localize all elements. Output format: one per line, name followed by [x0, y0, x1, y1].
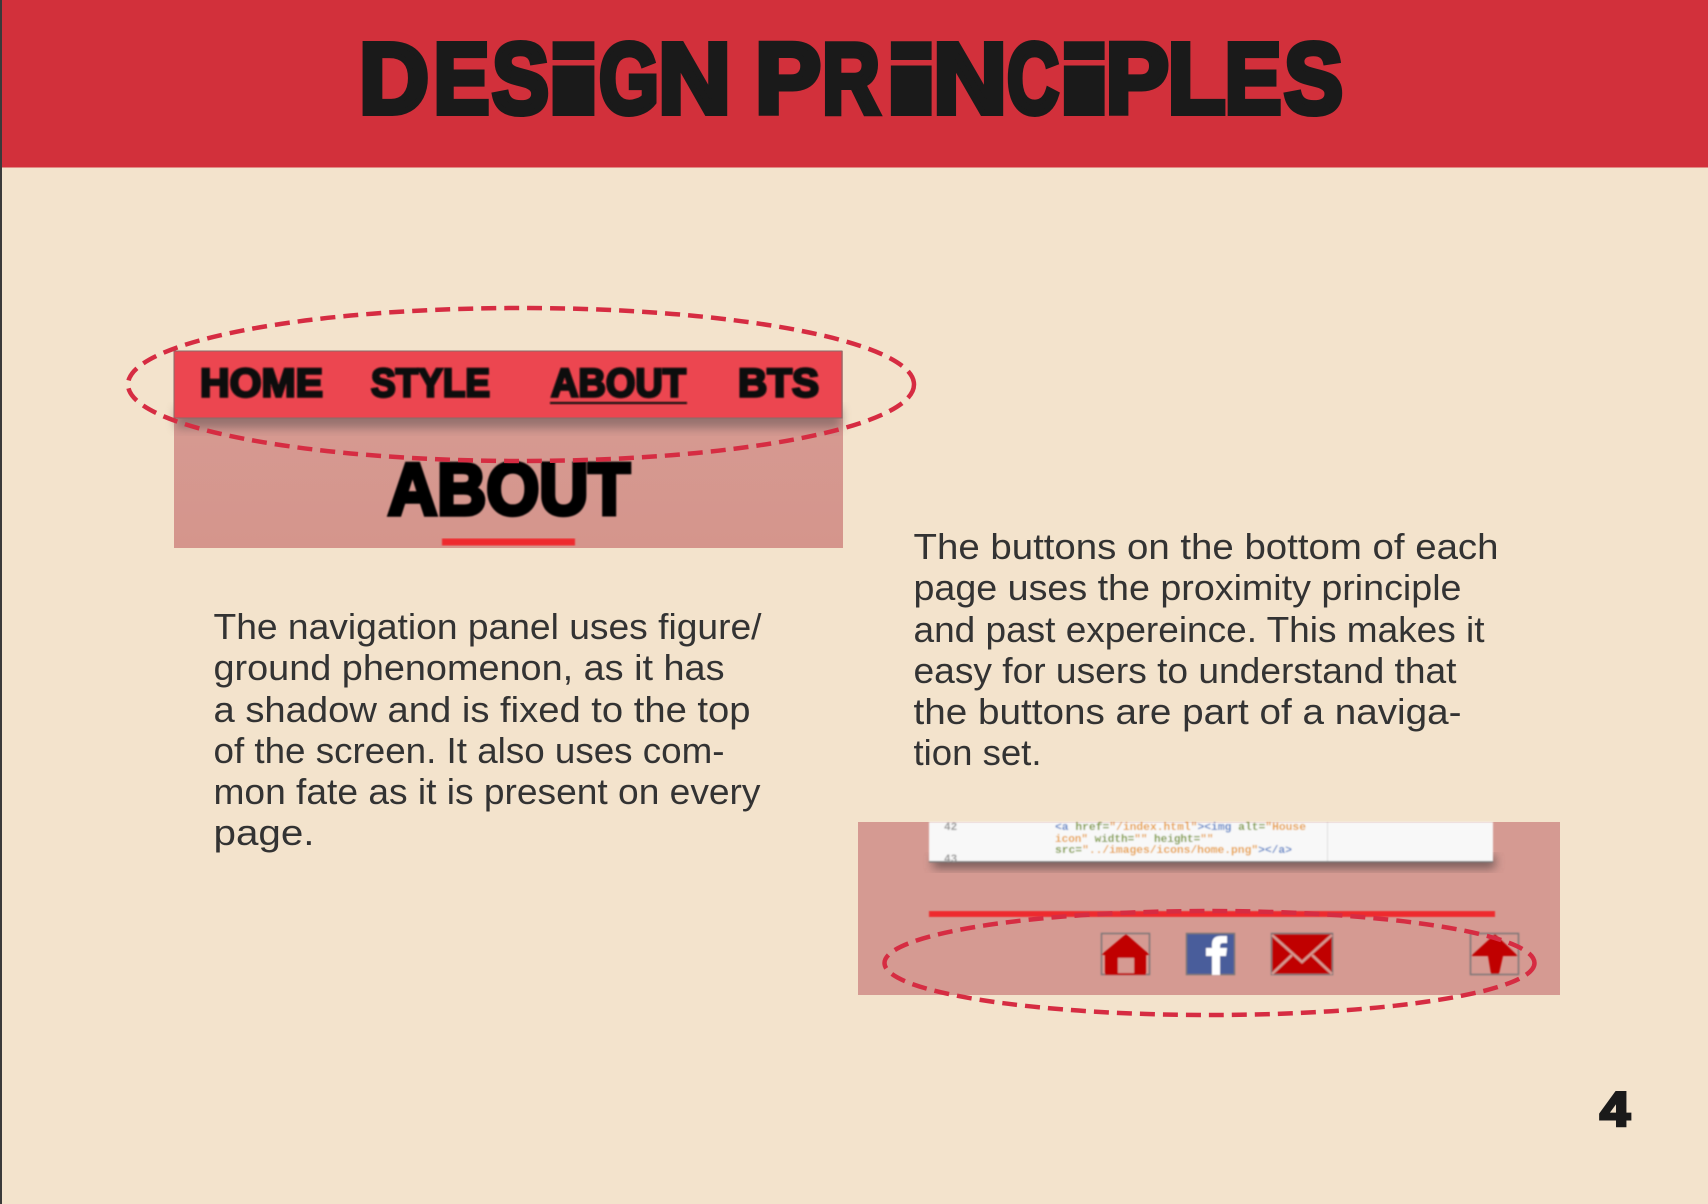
title: S: [1284, 23, 1343, 135]
text block: navigation explanation: The navigation panel uses figure/: [214, 606, 762, 647]
text block: navigation explanation: mon fate as it is present on every: [214, 771, 760, 812]
nav item: bts: BTS: [738, 362, 819, 406]
dashed ellipse: footer buttons highlight: [884, 911, 1534, 1015]
nav underline: [550, 402, 687, 404]
icon: home: [1101, 934, 1150, 975]
title: I: [1056, 23, 1112, 135]
title: N: [658, 23, 731, 135]
icon: mail: [1272, 934, 1332, 974]
page number: 4: [1600, 1084, 1630, 1137]
text block: navigation explanation: a shadow and is fixed to the top: [214, 689, 750, 730]
text block: buttons explanation: and past expereince. This makes it: [914, 609, 1484, 650]
title: D: [359, 23, 429, 135]
dashed ellipse: navigation highlight: [128, 308, 914, 461]
title: S: [492, 23, 549, 135]
text block: navigation explanation: of the screen. It also uses com-: [214, 730, 724, 771]
title: R: [822, 23, 880, 135]
title: C: [1007, 23, 1059, 135]
nav item: style: STYLE: [371, 362, 490, 406]
code card: icon" width="" height="": [1055, 834, 1213, 846]
panel: footer screenshot: [858, 822, 1560, 995]
text block: buttons explanation: page uses the proximity principle: [914, 567, 1462, 608]
text block: buttons explanation: tion set.: [914, 732, 1042, 773]
code card: 43: [944, 854, 958, 866]
title: I: [884, 23, 939, 135]
nav item: home: HOME: [200, 362, 323, 406]
icon: up arrow: [1470, 934, 1518, 974]
nav item: about: ABOUT: [551, 362, 686, 406]
text block: buttons explanation: easy for users to understand that: [914, 650, 1456, 691]
text block: buttons explanation: The buttons on the bottom of each: [914, 526, 1498, 567]
title: L: [1168, 23, 1226, 135]
title: P: [1106, 23, 1169, 135]
title: P: [755, 23, 821, 135]
page heading: about: ABOUT: [388, 450, 630, 530]
title banner: [2, 0, 1708, 168]
icon: facebook: [1186, 934, 1234, 975]
code card: src="../images/icons/home.png" ></a>: [1055, 845, 1292, 857]
title: N: [933, 23, 1007, 135]
panel: about page screenshot: [174, 351, 843, 548]
red divider: [929, 911, 1495, 917]
title: I: [545, 23, 602, 135]
title: E: [1224, 23, 1282, 135]
heading underline: [442, 538, 575, 546]
code card: <a href="/index.html"><img alt="House: [1055, 822, 1306, 834]
text block: navigation explanation: ground phenomenon, as it has: [214, 647, 724, 688]
text block: navigation explanation: page.: [214, 812, 314, 853]
title: [359, 23, 1343, 135]
code card: 42: [944, 822, 957, 834]
title: E: [434, 23, 490, 135]
text block: buttons explanation: the buttons are part of a naviga-: [914, 691, 1462, 732]
code card: [929, 822, 1493, 866]
navigation bar: [174, 351, 842, 418]
left page edge: [0, 0, 2, 1204]
title: G: [599, 23, 659, 135]
